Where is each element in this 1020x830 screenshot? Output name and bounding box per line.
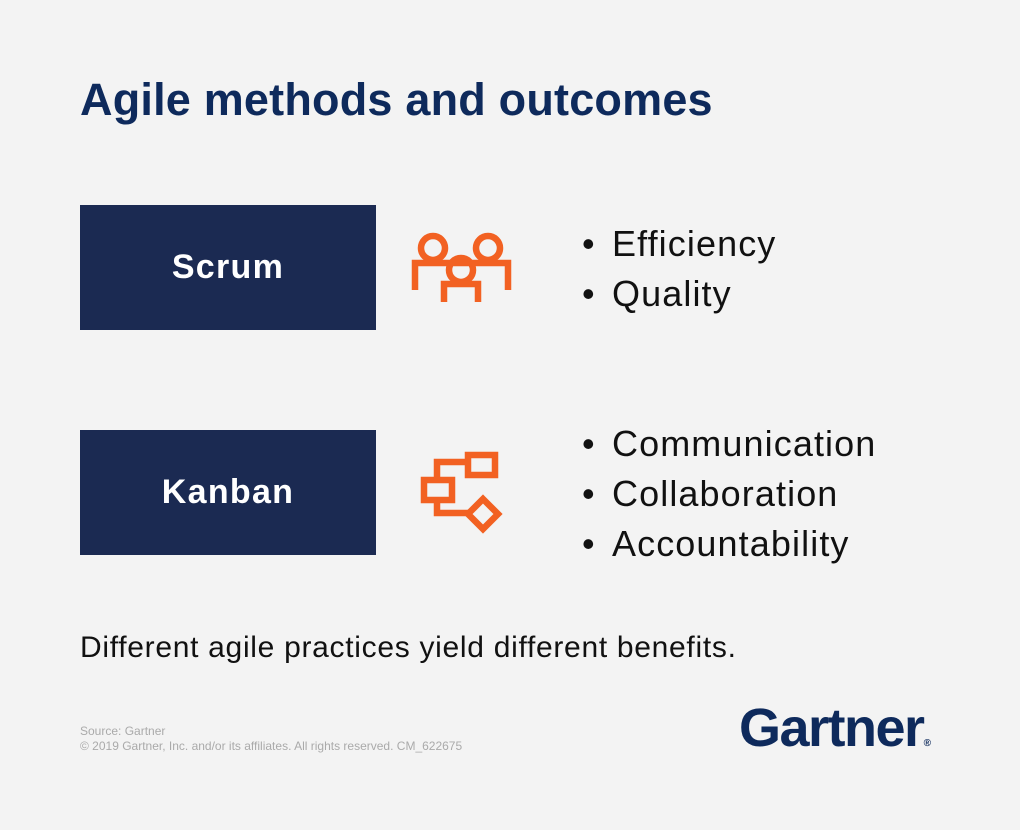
list: kanban outcomes: • xyxy=(582,523,596,564)
panel: scrum xyxy=(80,205,376,330)
panel: kanban xyxy=(80,430,376,555)
list: kanban outcomes: Communication xyxy=(612,423,876,464)
panel: scrum: Scrum xyxy=(172,248,284,286)
icon: flowchart xyxy=(420,452,502,534)
list: kanban outcomes: • xyxy=(582,473,596,514)
title: Agile methods and outcomes xyxy=(80,74,713,125)
footer: source xyxy=(80,724,462,753)
text: summary: Different agile practices yield different benefits. xyxy=(80,631,737,664)
list: scrum outcomes xyxy=(582,223,776,314)
footer: source: © 2019 Gartner, Inc. and/or its affiliates. All rights reserved. CM_622675 xyxy=(80,739,462,753)
list: scrum outcomes: • xyxy=(582,223,596,264)
list: kanban outcomes: • xyxy=(582,423,596,464)
icon: team xyxy=(412,232,512,302)
list: kanban outcomes xyxy=(582,423,876,564)
list: scrum outcomes: • xyxy=(582,273,596,314)
list: kanban outcomes: Collaboration xyxy=(612,473,838,514)
list: scrum outcomes: Quality xyxy=(612,273,732,314)
panel: kanban: Kanban xyxy=(162,473,294,511)
list: kanban outcomes: Accountability xyxy=(612,523,850,564)
list: scrum outcomes: Efficiency xyxy=(612,223,776,264)
footer: source: Source: Gartner xyxy=(80,724,165,738)
logo: Gartner® xyxy=(739,698,931,758)
